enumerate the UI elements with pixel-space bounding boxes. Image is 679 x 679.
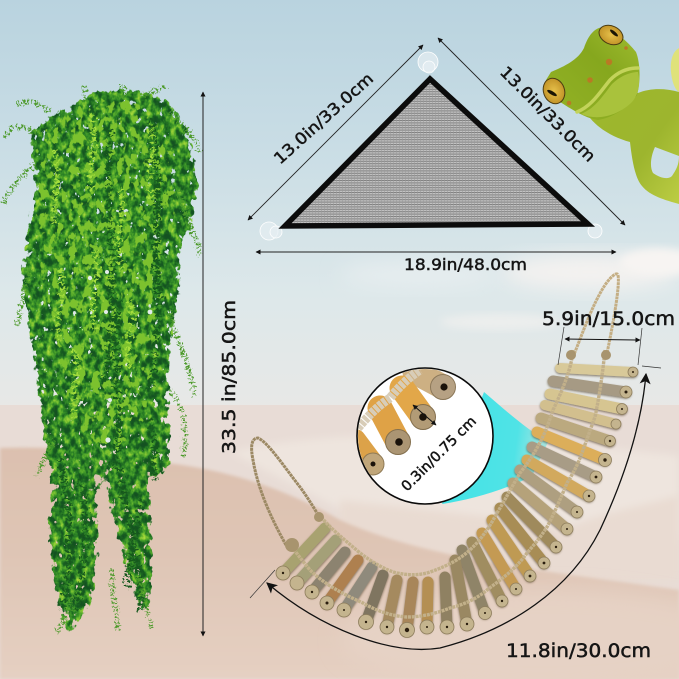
arrow: bridge width xyxy=(250,327,661,598)
arrow: hammock left edge xyxy=(248,45,423,220)
magnified bamboo xyxy=(355,370,456,475)
magnifier disc xyxy=(357,368,493,504)
magnifier inset xyxy=(355,368,493,504)
rope knots xyxy=(285,350,611,552)
arrow: hammock bottom edge xyxy=(256,251,616,253)
frog body and legs xyxy=(590,80,679,204)
label: hammock left edge: 13.0in/33.0cm xyxy=(270,69,377,168)
rung holes xyxy=(282,371,634,632)
frog cheek xyxy=(581,72,639,117)
bamboo rope bridge xyxy=(252,274,638,638)
rung end caps xyxy=(276,367,638,638)
left rope loop xyxy=(252,438,320,545)
arrow: bridge length arc xyxy=(267,374,646,649)
arrow: plant height xyxy=(202,92,204,636)
suction cups xyxy=(260,52,602,240)
label: bridge width: 5.9in/15.0cm xyxy=(542,309,675,330)
plant leaf mass xyxy=(22,90,198,636)
inner rope xyxy=(322,350,573,575)
plant: hanging fern vine xyxy=(3,85,200,636)
mesh triangle xyxy=(285,79,588,226)
dark fronds xyxy=(60,120,160,610)
frog spots xyxy=(567,46,628,105)
frog top eye xyxy=(596,22,626,48)
arrow: hammock right edge xyxy=(438,38,625,225)
frog cheek fold xyxy=(577,68,638,112)
frog left eye xyxy=(540,75,568,107)
bamboo diameter arrow xyxy=(413,405,436,425)
cyan beam from magnifier to bridge xyxy=(442,392,548,504)
outer rope xyxy=(290,350,605,617)
small sky gaps between leaves xyxy=(88,270,152,443)
trailing stems xyxy=(3,85,200,633)
top rope loop xyxy=(573,274,618,358)
label: hammock bottom edge: 18.9in/48.0cm xyxy=(404,255,527,274)
label: hammock right edge: 13.0in/33.0cm xyxy=(496,62,599,166)
second frog edge xyxy=(671,48,679,92)
bamboo rungs xyxy=(283,368,633,630)
frog head xyxy=(546,27,640,120)
hammock: triangular mesh xyxy=(260,52,602,240)
bamboo diameter label: 0.3in/0.75 cm xyxy=(399,414,480,495)
label: plant height: 33.5 in/85.0cm xyxy=(219,300,240,454)
frog figurine xyxy=(540,22,679,204)
lime highlights xyxy=(54,115,153,420)
label: bridge length: 11.8in/30.0cm xyxy=(506,641,651,662)
bright upper foliage xyxy=(28,95,185,470)
